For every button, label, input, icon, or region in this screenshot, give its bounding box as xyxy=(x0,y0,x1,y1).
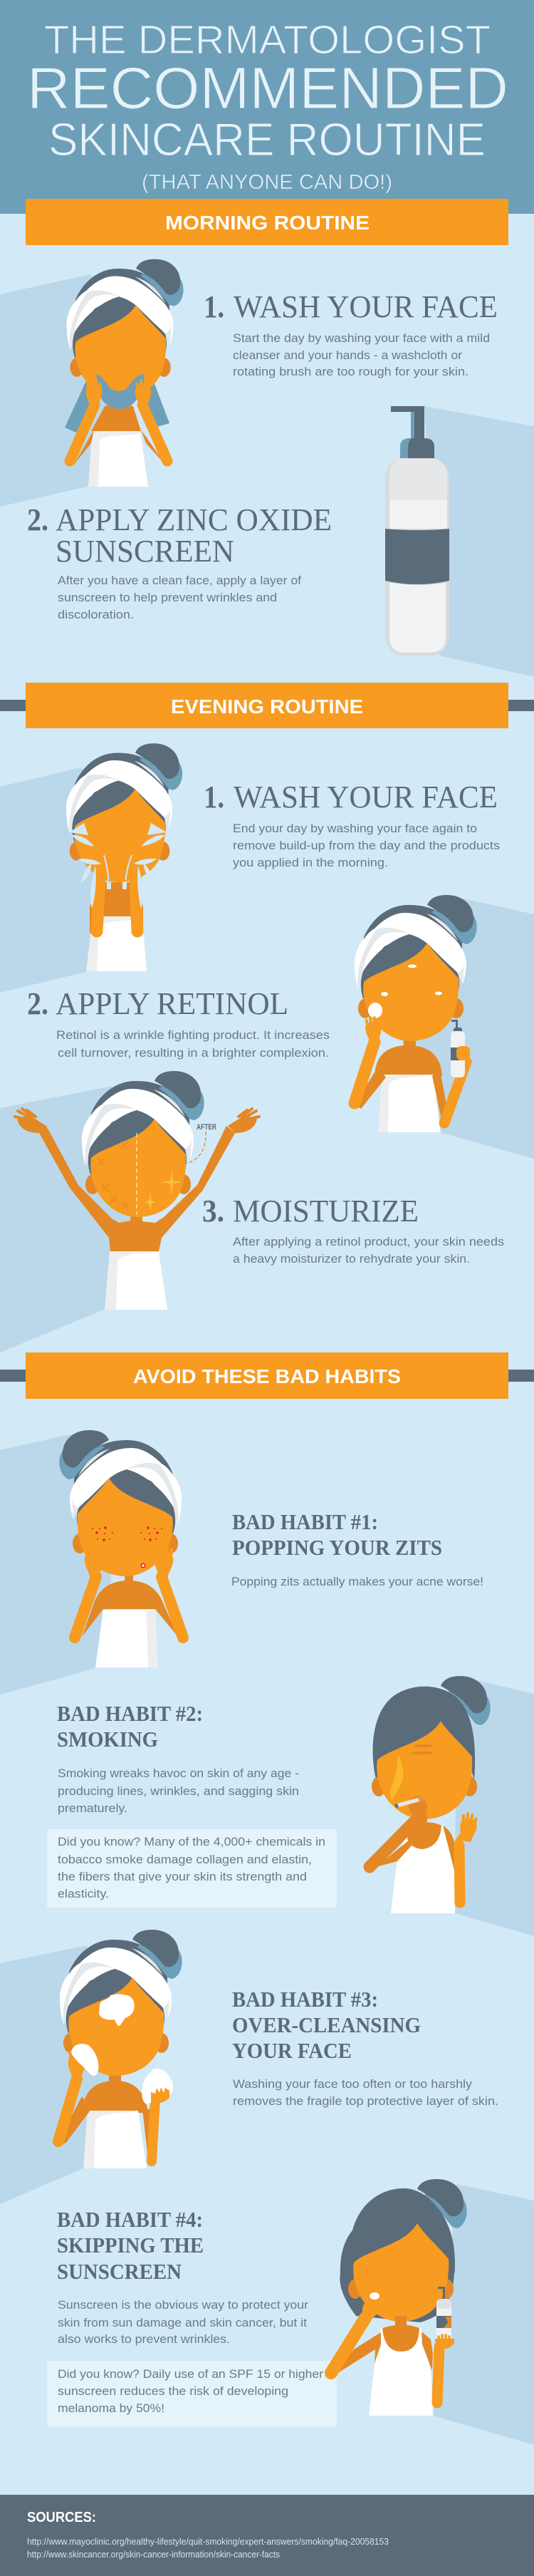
text: bad habit 4: BAD HABIT #4: xyxy=(57,2207,203,2232)
text: bad habit 4: SUNSCREEN xyxy=(57,2259,182,2284)
callout: did you know, sunscreen: melanoma by 50%! xyxy=(58,2401,164,2415)
text: bad habit 4: SKIPPING THE xyxy=(57,2233,204,2257)
title: THE DERMATOLOGIST xyxy=(44,17,491,63)
step: wash your face (evening): remove build-up from the day and the products xyxy=(233,839,500,852)
step: wash your face (morning) xyxy=(204,289,498,378)
icon: small retinol bottle xyxy=(451,1020,470,1077)
step: wash your face (morning): cleanser and your hands - a washcloth or xyxy=(233,348,462,362)
banner: morning routine: MORNING ROUTINE xyxy=(165,212,370,234)
banner: morning routine xyxy=(26,199,508,245)
step: wash your face (evening): 1. xyxy=(204,780,224,814)
person: evening wash with water xyxy=(0,743,182,993)
text: bad habit 4: skin from sun damage and skin cancer, but it xyxy=(58,2316,307,2329)
step: apply zinc oxide sunscreen: 2. xyxy=(27,502,48,537)
footer panel: sources: http://www.mayoclinic.org/healthy-lifestyle/quit-smoking/expert-answers/smoking/faq-20058153 xyxy=(27,2536,389,2547)
text: bad habit 4: Sunscreen is the obvious way to protect your xyxy=(58,2298,308,2312)
step: apply zinc oxide sunscreen: APPLY ZINC OXIDE xyxy=(56,502,332,537)
step: apply zinc oxide sunscreen: After you have a clean face, apply a layer of xyxy=(58,574,301,587)
banner: avoid these bad habits: AVOID THESE BAD HABITS xyxy=(133,1365,401,1387)
text: bad habit 2: SMOKING xyxy=(57,1727,158,1752)
banner: evening routine xyxy=(0,683,534,728)
foam on right hand xyxy=(142,2069,173,2104)
callout: did you know, smoking: Did you know? Many of the 4,000+ chemicals in xyxy=(58,1835,325,1848)
step: moisturize: a heavy moisturizer to rehydrate your skin. xyxy=(233,1252,470,1266)
step: apply zinc oxide sunscreen: discoloration. xyxy=(58,608,134,621)
step: apply zinc oxide sunscreen: sunscreen to help prevent wrinkles and xyxy=(58,591,277,604)
text: bad habit 3 xyxy=(232,1987,498,2108)
step: wash your face (evening): End your day by washing your face again to xyxy=(233,822,477,835)
title: SKINCARE ROUTINE xyxy=(48,113,486,165)
text: bad habit 1 xyxy=(231,1509,483,1588)
footer panel: sources xyxy=(0,2495,534,2576)
step: wash your face (morning): 1. xyxy=(204,289,224,324)
callout: did you know, smoking: the fibers that give your skin its strength and xyxy=(58,1870,307,1883)
step: moisturize: MOISTURIZE xyxy=(233,1194,419,1228)
text: bad habit 3: Washing your face too often or too harshly xyxy=(233,2077,473,2091)
callout: did you know, sunscreen: Did you know? Daily use of an SPF 15 or higher xyxy=(58,2367,323,2381)
step: apply zinc oxide sunscreen: SUNSCREEN xyxy=(56,534,234,569)
callout: did you know, sunscreen xyxy=(47,2361,337,2426)
step: apply retinol: 2. xyxy=(27,986,48,1021)
title xyxy=(27,17,508,194)
step: wash your face (morning): WASH YOUR FACE xyxy=(234,289,498,324)
step: apply retinol: APPLY RETINOL xyxy=(56,986,288,1021)
step: moisturize: 3. xyxy=(202,1194,224,1228)
person: popping zits xyxy=(0,1430,183,1695)
text: bad habit 4 xyxy=(57,2207,308,2346)
step: apply zinc oxide sunscreen xyxy=(27,502,332,621)
person: over-cleansing xyxy=(0,1930,182,2204)
text: bad habit 1: POPPING YOUR ZITS xyxy=(232,1535,442,1560)
icon: cigarette xyxy=(394,1796,424,1808)
person: applying retinol xyxy=(355,895,534,1159)
person: smoking xyxy=(370,1676,534,1936)
callout: did you know, smoking: elasticity. xyxy=(58,1887,109,1900)
person: skipping the sunscreen xyxy=(331,2179,534,2445)
text: bad habit 2 xyxy=(57,1701,299,1815)
footer panel: sources: SOURCES: xyxy=(27,2510,96,2525)
text: bad habit 2: Smoking wreaks havoc on skin of any age - xyxy=(58,1767,299,1780)
callout: did you know, sunscreen: sunscreen reduces the risk of developing xyxy=(58,2384,288,2398)
step: apply retinol: cell turnover, resulting in a brighter complexion. xyxy=(58,1046,329,1060)
step: wash your face (morning): Start the day by washing your face with a mild xyxy=(233,331,490,345)
text: bad habit 3: YOUR FACE xyxy=(232,2038,352,2063)
callout: did you know, smoking xyxy=(47,1829,337,1908)
step: wash your face (evening): WASH YOUR FACE xyxy=(234,780,498,814)
text: bad habit 1: Popping zits actually makes your acne worse! xyxy=(231,1575,483,1588)
label: after: AFTER xyxy=(197,1123,216,1132)
text: bad habit 1: BAD HABIT #1: xyxy=(232,1509,378,1534)
header panel xyxy=(0,0,534,214)
text: bad habit 2: producing lines, wrinkles, and sagging skin xyxy=(58,1784,299,1798)
text: bad habit 3: OVER-CLEANSING xyxy=(232,2012,421,2037)
title: RECOMMENDED xyxy=(27,55,508,121)
callout: did you know, smoking: tobacco smoke damage collagen and elastin, xyxy=(58,1853,312,1866)
icon: small sunscreen bottle xyxy=(436,2287,451,2343)
footer panel: sources: http://www.skincancer.org/skin-cancer-information/skin-cancer-facts xyxy=(27,2549,280,2560)
icon: sunscreen pump bottle xyxy=(385,406,534,677)
step: wash your face (evening) xyxy=(204,780,500,869)
text: bad habit 3: BAD HABIT #3: xyxy=(232,1987,378,2012)
person: moisturize, arms raised xyxy=(0,1071,259,1352)
person: morning wash with washcloth xyxy=(0,259,184,507)
step: wash your face (evening): you applied in the morning. xyxy=(233,856,388,869)
text: bad habit 4: also works to prevent wrinkles. xyxy=(58,2332,230,2346)
acne spots xyxy=(92,1526,162,1568)
step: wash your face (morning): rotating brush are too rough for your skin. xyxy=(233,365,468,378)
foam on left hand xyxy=(71,2044,98,2076)
step: moisturize xyxy=(202,1194,504,1266)
step: apply retinol xyxy=(27,986,330,1060)
step: moisturize: After applying a retinol product, your skin needs xyxy=(233,1235,504,1248)
text: bad habit 2: BAD HABIT #2: xyxy=(57,1701,203,1726)
text: bad habit 3: removes the fragile top protective layer of skin. xyxy=(233,2094,498,2108)
foam on forehead xyxy=(99,1994,135,2026)
text: bad habit 2: prematurely. xyxy=(58,1801,127,1815)
title: (THAT ANYONE CAN DO!) xyxy=(142,171,392,194)
step: apply retinol: Retinol is a wrinkle fighting product. It increases xyxy=(56,1028,330,1042)
banner: evening routine: EVENING ROUTINE xyxy=(171,695,363,718)
banner: avoid these bad habits xyxy=(0,1352,534,1399)
